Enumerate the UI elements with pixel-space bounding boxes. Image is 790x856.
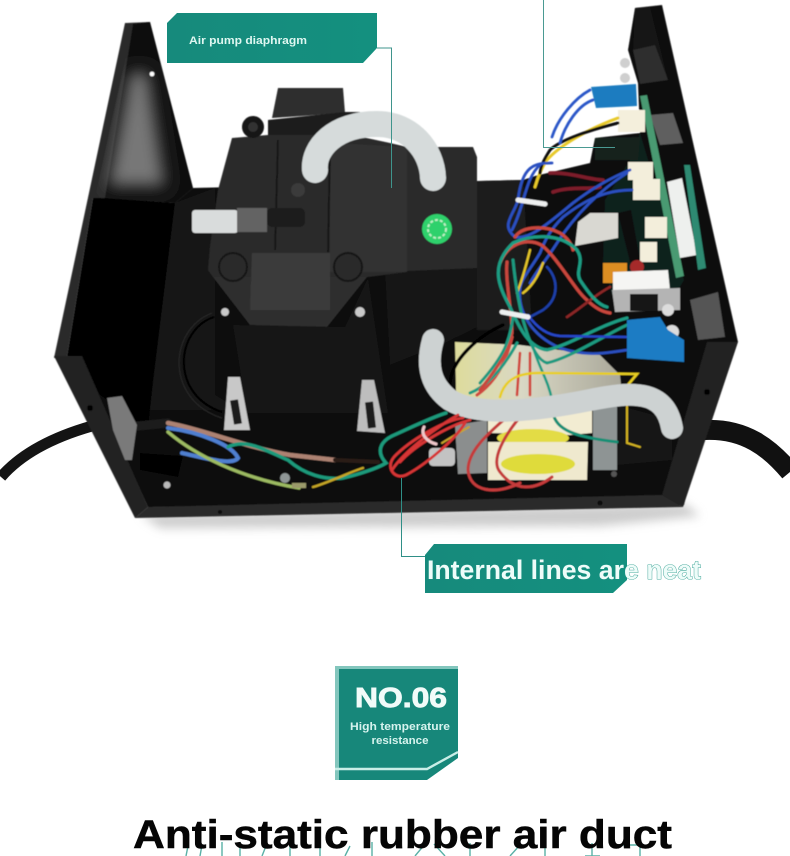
left wall screw hole [150,72,154,76]
bottom front lip [135,495,683,518]
left tube stub [192,210,238,233]
label text: Internal lines are neat [427,555,701,585]
lower tape [690,292,725,340]
badge plate [339,669,458,780]
cable ties [502,200,545,317]
teal wire [228,413,446,478]
mount knobs [219,253,362,281]
blue wire [168,428,238,461]
cable stub [128,423,168,427]
left wall glare [108,72,165,186]
white sticker [667,178,697,258]
board bright edge [640,95,684,278]
red part [630,260,644,274]
back panel [477,180,532,330]
metal bracket [612,288,680,312]
sticker text ring [428,220,446,238]
upper blue connectors [591,84,637,108]
circuit board back [603,133,684,300]
upper air tube [315,124,433,178]
badge light edge [335,666,458,780]
teal board edge [684,165,706,270]
yellow wire [500,373,637,397]
red loops [468,417,552,490]
red wire upper [477,337,512,395]
white connector top [618,110,645,132]
black wire [450,325,503,385]
transformer metal side left [455,420,487,474]
white connector group [628,162,667,262]
label text: Air pump diaphragm [189,35,307,47]
lower air tube [430,340,672,428]
wire bundle [480,90,632,390]
pump wings [213,277,367,327]
badge: NO.06 [335,666,458,780]
transformer lower paper [488,442,588,480]
right front strip [662,342,738,507]
interior dark mass [82,133,720,507]
middle panel [330,143,407,272]
transformer lower coil [501,454,575,474]
left wall lower face [67,198,175,430]
label plate [167,13,377,63]
ground lug [292,483,306,488]
teal wires [498,237,627,350]
ground shadow [140,504,700,528]
teal lower loop [553,413,617,442]
leader line: internal lines [402,478,428,556]
ic chip [618,210,640,262]
left wall upper face [105,22,193,203]
left tube sleeve [237,208,267,232]
label plate [425,544,627,593]
pump front plate [250,253,330,310]
yellow upper wire [442,427,469,443]
transformer black bracket right [617,405,672,465]
right wall top band [633,7,668,80]
transformer metal side right [593,405,617,470]
terminals [662,304,679,339]
left wall outer rim [54,22,193,358]
yellow wire [535,118,618,187]
label: internal lines are neat [425,544,701,593]
upper terminals [620,58,630,83]
right strip hole [704,389,710,395]
lower blue connectors [627,317,684,362]
thin black cable [184,317,222,412]
bracket black centre [630,294,658,311]
thin black cable light [179,313,222,418]
badge number: NO.06 [355,682,447,713]
yellow wire lower [627,405,640,447]
green sticker [422,214,452,244]
pump top ring [245,119,261,135]
brown wire tail [335,460,378,462]
pump logo circle [291,183,305,197]
foot shadow detail [234,400,372,428]
transformer wires [450,325,640,490]
capacitor [595,137,640,160]
upper gray tape [633,45,668,84]
badge subtitle line 2: resistance [372,735,428,747]
transformer bolt [429,448,455,466]
dark red wire [567,287,610,317]
black wire [540,123,618,173]
yellow ground wire [313,468,363,487]
transformer upper coil [497,429,569,447]
pump left seam [275,140,330,252]
floor side panel [150,188,240,410]
left cable wires [128,413,470,488]
orange part [603,263,627,283]
teal down [533,347,552,400]
badge stripe [335,752,458,769]
chassis screws [164,471,617,514]
strain clamp [140,453,183,477]
pump top block [272,88,345,118]
label: air pump diaphragm [167,13,377,63]
power cables [1,426,790,477]
left tube plug [267,208,305,227]
pump middle body [208,130,407,277]
mount screws [221,307,365,317]
red wires [480,228,610,390]
silver label [613,270,670,291]
pump top ledge [268,112,362,135]
ground screw [280,473,290,483]
blue loop [530,267,556,317]
blue bundle [508,163,632,354]
title: Anti-static rubber air duct [133,813,672,856]
red loops [391,415,470,476]
cable clamp [107,396,137,460]
leader line: top right [544,0,615,148]
middle gray tape [650,113,683,145]
transformer upper plate [455,342,622,410]
brown wire [168,423,335,460]
transformer top paper [488,405,592,435]
red pair [517,353,530,395]
pump lower box [385,268,477,365]
metal foot right [357,380,385,433]
upper blue wires [552,90,593,143]
transformer [429,342,672,480]
dark red wires [550,173,603,192]
lower blue wire [528,315,627,337]
pump rear box [405,147,477,345]
yellow mid wires [517,250,543,293]
green yellow wire [168,432,299,488]
cable tie [423,427,436,444]
left front strip [54,356,148,518]
teal wire upper [470,343,517,393]
white socket [575,213,618,246]
right wall [628,5,738,495]
product photo: soldering station chassis [54,5,738,518]
left strip hole [87,405,93,411]
metal foot left [224,377,250,430]
right wall fittings [620,45,725,340]
pump lower motor [233,278,388,413]
badge subtitle line 1: High temperature [350,721,450,733]
leader line: air pump diaphragm [377,48,392,188]
